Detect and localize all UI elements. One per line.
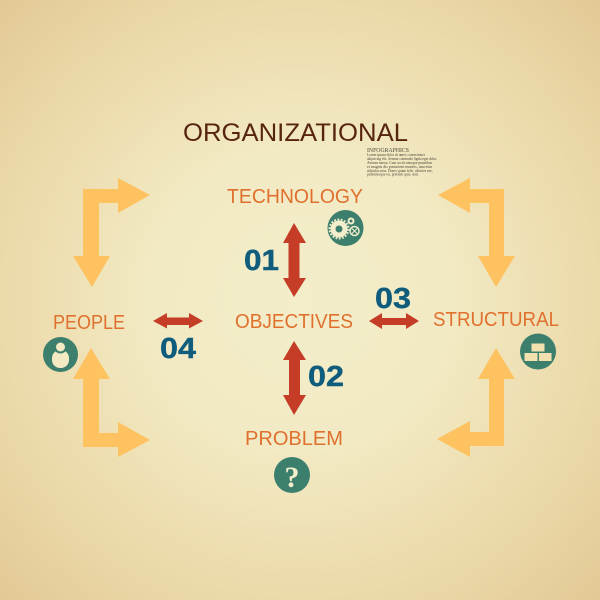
arrow: bottom left (73, 348, 150, 457)
arrow: bottom right (437, 348, 515, 457)
label: objectives: OBJECTIVES (235, 311, 353, 333)
number 02: 02 (308, 361, 344, 393)
text block: infographics: Aenean massa. Cum sociis natoque penatibus (367, 161, 433, 165)
title: ORGANIZATIONAL (183, 119, 408, 147)
text block: infographics: et magnis dis parturient montes, nascetur (367, 165, 433, 170)
label: people: PEOPLE (53, 312, 125, 334)
red arrow: objectives to problem (283, 341, 306, 415)
number 03: 03 (375, 283, 411, 315)
number 01: 01 (244, 245, 279, 277)
text block: infographics: pellentesque eu, pretium quis, sem. (367, 172, 419, 178)
icon: blocks (520, 334, 556, 370)
number 04: 04 (160, 333, 196, 365)
label: problem: PROBLEM (245, 428, 343, 450)
text block: infographics: adipiscing elit. Aenean commodo ligula eget dolor. (367, 157, 437, 161)
icon: person (43, 337, 78, 372)
red arrow: objectives to structural (369, 313, 419, 329)
label: technology: TECHNOLOGY (227, 186, 363, 208)
arrow: top right (438, 178, 515, 287)
red arrow: people to objectives (153, 313, 203, 328)
icon: question mark (274, 457, 310, 494)
text block: infographics: ridiculus mus. Donec quam felis, ultricies nec, (367, 169, 433, 174)
arrow: top left (73, 178, 150, 287)
red arrow: technology to objectives (283, 223, 306, 297)
text block: infographics (367, 148, 437, 178)
text block: infographics: INFOGRAPHICS (367, 148, 409, 154)
label: structural: STRUCTURAL (433, 309, 559, 331)
text block: infographics: Lorem ipsum dolor sit amet, consectetuer (367, 153, 426, 158)
icon: gears (328, 210, 364, 246)
icon: question mark: ? (284, 461, 300, 494)
